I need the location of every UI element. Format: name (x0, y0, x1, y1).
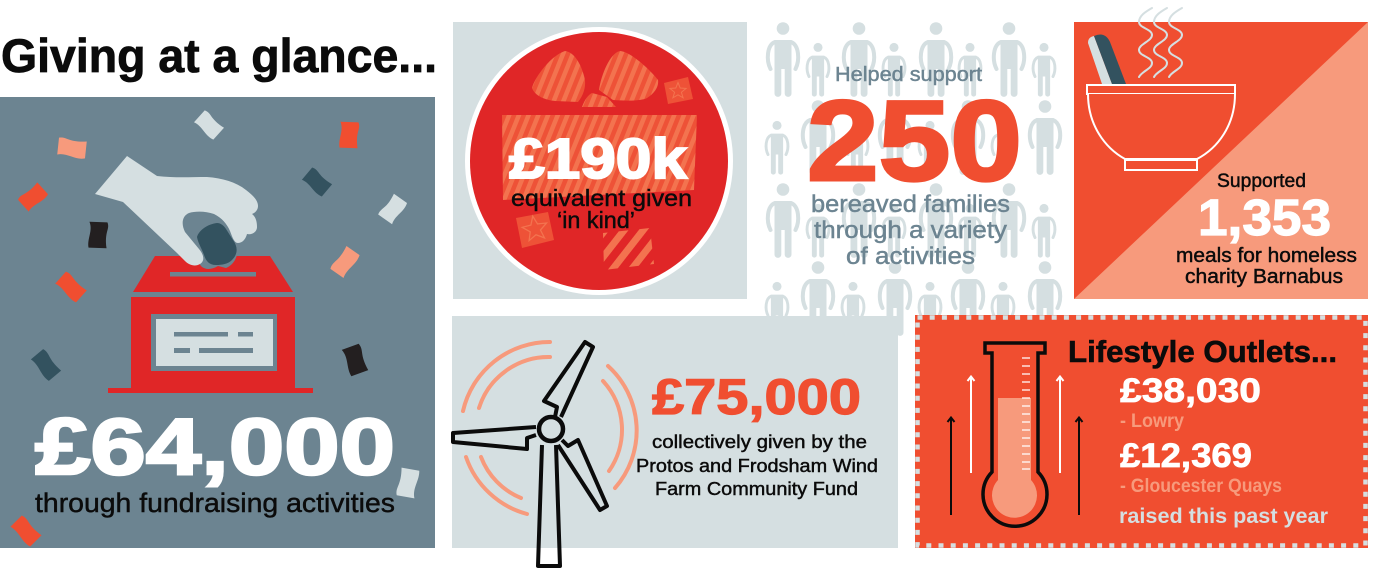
text: wind farm fund: Farm Community Fund (655, 478, 858, 499)
panel: meals (1074, 8, 1368, 299)
people pattern (766, 22, 1060, 336)
panel: wind farm (452, 316, 898, 566)
icon: hand with coin (95, 156, 258, 269)
text: wind farm fund: collectively given by the (652, 431, 867, 452)
amount: £75,000: £75,000 (652, 369, 861, 425)
amount: lowry: £38,030 (1120, 372, 1261, 410)
caption: in kind: ‘in kind’ (557, 207, 635, 233)
caption: fundraising: through fundraising activities (35, 488, 395, 518)
text: supported: Supported (1217, 171, 1306, 192)
heading: lifestyle outlets: Lifestyle Outlets... (1068, 334, 1337, 369)
title: Giving at a glance... (1, 29, 437, 82)
text: bereaved families: through a variety (814, 217, 1007, 244)
amount: £190k: £190k (509, 127, 687, 191)
caption: in kind: equivalent given (511, 185, 692, 211)
number: 1,353: 1,353 (1198, 189, 1331, 246)
text: meals: charity Barnabus (1185, 266, 1343, 288)
label: lowry: - Lowry (1120, 411, 1184, 432)
amount: gloucester quays: £12,369 (1120, 437, 1252, 475)
icon: motion arcs (463, 342, 637, 514)
amount: £64,000: £64,000 (35, 402, 395, 491)
text: bereaved families: bereaved families (811, 191, 1010, 218)
panel: fundraising (0, 97, 435, 548)
icon: thermometer (983, 343, 1047, 526)
text: wind farm fund (636, 431, 878, 499)
text: meals (1176, 245, 1357, 288)
icon: wind turbine (453, 342, 607, 566)
caption: in kind (511, 185, 692, 233)
label: gloucester quays: - Gloucester Quays (1120, 476, 1282, 497)
panel: lifestyle outlets (915, 315, 1368, 548)
icon: gift (502, 51, 697, 270)
text: wind farm fund: Protos and Frodsham Wind (636, 455, 878, 476)
number: 250: 250 (807, 78, 1022, 205)
icon: bowl and spoon (1087, 34, 1235, 170)
text: bereaved families: of activities (846, 243, 975, 270)
donation box (108, 256, 313, 393)
text: helped support: Helped support (835, 64, 982, 86)
confetti (10, 110, 420, 547)
icon: steam (1139, 8, 1182, 77)
icon: rising arrows (948, 376, 1082, 515)
text: meals: meals for homeless (1176, 245, 1357, 267)
panel: in kind (453, 22, 747, 299)
text: bereaved families (811, 191, 1010, 270)
text: raised this past year: raised this past year (1119, 505, 1328, 528)
